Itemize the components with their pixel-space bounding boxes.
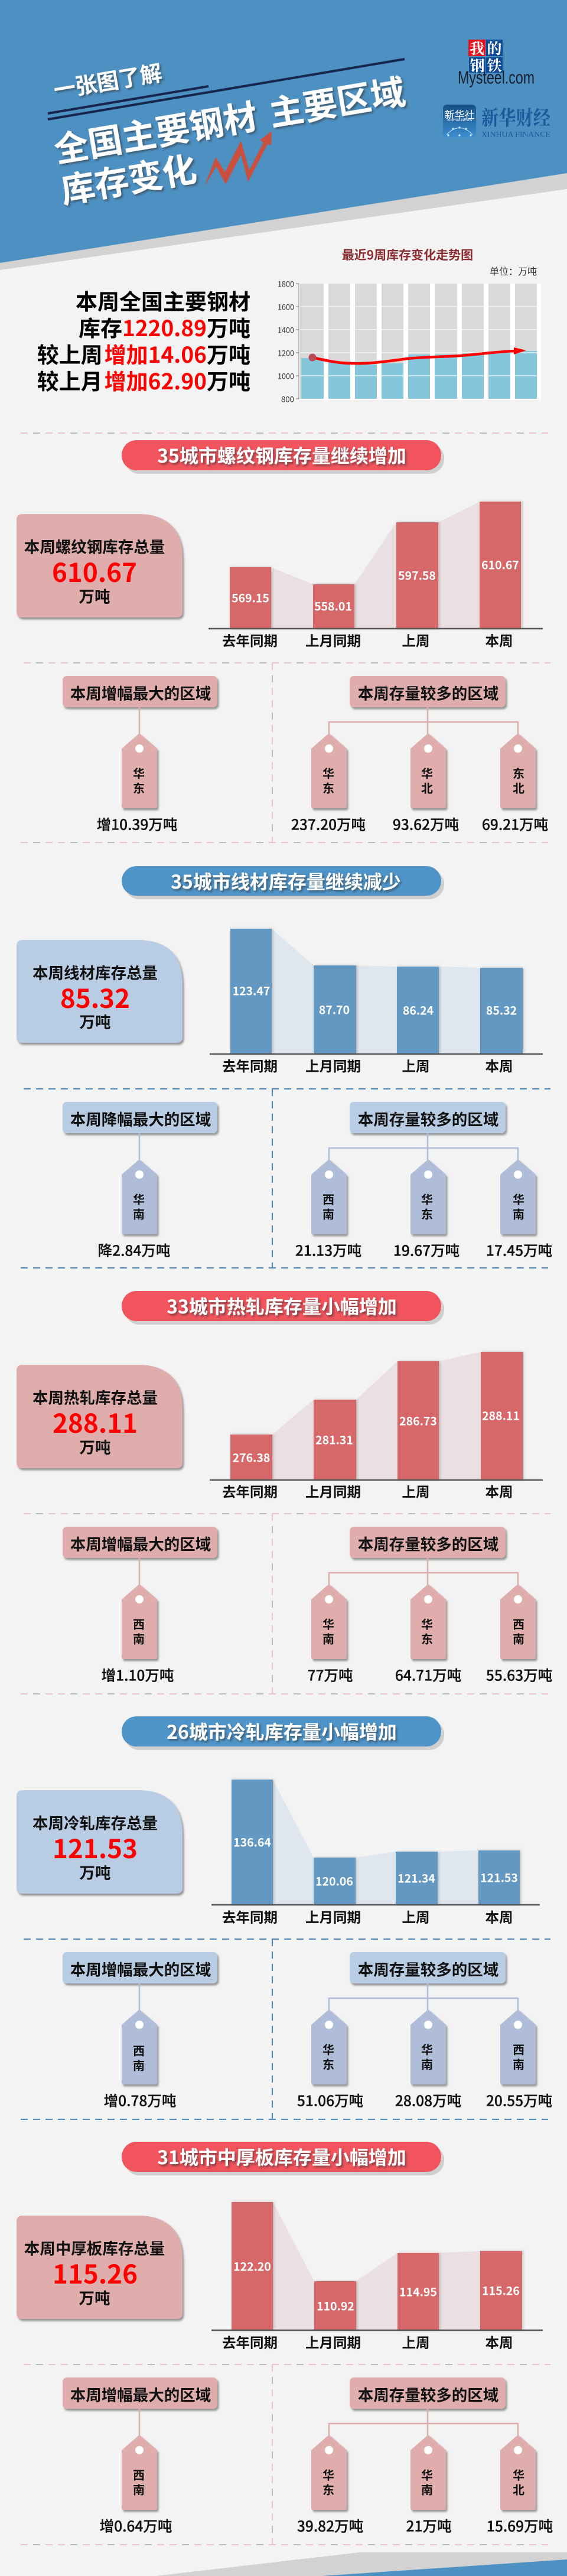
bar chart: 本周 xyxy=(485,1481,513,1501)
regions panel xyxy=(21,2364,553,2545)
logo: Mysteel: Mysteel.com xyxy=(458,67,535,87)
bar chart: 121.53 xyxy=(480,1868,518,1886)
right values xyxy=(297,2090,552,2110)
title line 1: 全国主要钢材 主要区域 xyxy=(50,64,408,173)
total stock box: 121.53 xyxy=(53,1828,138,1866)
total stock box: 万吨 xyxy=(79,1009,111,1033)
right values: 69.21万吨 xyxy=(482,814,548,834)
left value: 增0.78万吨 xyxy=(104,2090,176,2110)
bar chart xyxy=(210,1352,543,1501)
heading pill: 33城市热轧库存量小幅增加 xyxy=(167,1292,397,1319)
left label: largest increase xyxy=(63,1527,217,1558)
chart blue columns xyxy=(301,351,537,399)
tag: 华南: 南 xyxy=(513,1205,524,1222)
tag: 西南 xyxy=(122,2009,157,2084)
tag: 西南: 西 xyxy=(513,1615,524,1632)
right values xyxy=(297,2516,553,2536)
bar chart: 本周 xyxy=(485,630,513,650)
summary stats text: 本周全国主要钢材 xyxy=(76,284,250,316)
right connector xyxy=(329,707,518,734)
summary stats text xyxy=(37,284,250,396)
tag: 西南: 南 xyxy=(513,1629,524,1647)
right values: 39.82万吨 xyxy=(297,2516,363,2536)
chart gridlines xyxy=(299,307,541,376)
left label: largest increase xyxy=(63,2377,217,2409)
right values: 237.20万吨 xyxy=(291,814,366,834)
tag: 华北: 北 xyxy=(513,2480,524,2498)
right values: 64.71万吨 xyxy=(395,1665,461,1685)
tag: 西南: 西 xyxy=(513,2041,524,2057)
chart y labels: 1000 xyxy=(278,370,294,382)
tag: 华南 xyxy=(311,1584,347,1659)
tag: 西南: 西 xyxy=(133,2466,145,2483)
total stock box: 本周冷轧库存总量 xyxy=(32,1810,158,1834)
tag: 华南: 华 xyxy=(133,1190,145,1208)
tag: 华南: 南 xyxy=(421,2055,433,2073)
total stock box xyxy=(17,2216,183,2319)
tag: 华东: 华 xyxy=(421,1190,433,1208)
tag: 华东: 华 xyxy=(322,2041,334,2057)
tag: 华东 xyxy=(122,733,157,808)
chart unit: 单位：万吨 xyxy=(490,264,537,278)
total stock box: 万吨 xyxy=(79,1435,111,1458)
heading pill: 35城市线材库存量继续减少 xyxy=(171,867,401,895)
banner grey band xyxy=(0,0,567,270)
bar chart: 281.31 xyxy=(315,1431,353,1448)
total stock box: 本周螺纹钢库存总量 xyxy=(24,534,165,558)
bar chart: 558.01 xyxy=(314,597,352,614)
total stock box xyxy=(17,1365,183,1468)
right values xyxy=(295,1240,552,1261)
right values: 93.62万吨 xyxy=(393,814,459,834)
bar chart: 114.95 xyxy=(399,2283,437,2299)
summary stats text: 较上月增加62.90万吨 xyxy=(37,364,250,396)
tag: 华南 xyxy=(500,1159,536,1234)
chart y labels: 1400 xyxy=(278,324,294,336)
total stock box: 85.32 xyxy=(60,978,130,1016)
right values xyxy=(291,814,548,834)
right connector xyxy=(329,1558,518,1585)
bar chart: 597.58 xyxy=(398,566,436,584)
bar chart: 去年同期 xyxy=(222,1055,278,1075)
trend chart: last 9 weeks xyxy=(278,246,541,404)
left connector xyxy=(139,1558,140,1585)
bar chart: 136.64 xyxy=(233,1833,271,1850)
bar chart: 569.15 xyxy=(232,588,269,606)
bar chart: 本周 xyxy=(485,1906,513,1926)
tag: 华南: 华 xyxy=(421,2041,433,2057)
logo: Mysteel xyxy=(458,37,535,87)
left label: largest increase: 本周增幅最大的区域 xyxy=(70,2382,211,2406)
tag: 西南: 南 xyxy=(133,2056,145,2074)
tag: 西南 xyxy=(122,2435,157,2510)
bar chart: 110.92 xyxy=(317,2297,354,2314)
chart y labels xyxy=(278,278,294,404)
bar chart: 去年同期 xyxy=(222,2331,278,2351)
right label: highest stock xyxy=(350,1102,506,1133)
heading pill xyxy=(122,866,444,899)
right label: highest stock xyxy=(350,676,506,707)
bar chart: 121.34 xyxy=(397,1869,435,1886)
bar chart: 上月同期 xyxy=(305,1055,361,1075)
left value: 增0.64万吨 xyxy=(100,2516,172,2536)
bar chart: 上周 xyxy=(402,1055,430,1075)
bar chart: 286.73 xyxy=(399,1412,437,1429)
bar chart: 本周 xyxy=(485,1055,513,1075)
footer corner xyxy=(155,2552,567,2576)
tag: 华东 xyxy=(410,1584,446,1659)
chart plot white background xyxy=(299,284,541,400)
tag: 西南: 南 xyxy=(322,1205,334,1222)
section 1: rebar xyxy=(17,440,550,843)
tag: 华北: 华 xyxy=(421,765,433,781)
tag: 华东: 华 xyxy=(421,1615,433,1632)
logo: Xinhua news xyxy=(443,105,476,138)
divider above section 1 xyxy=(21,432,548,434)
icon: red zigzag arrow xyxy=(204,131,272,187)
tag: 华南: 华 xyxy=(421,2466,433,2483)
chart y labels: 1600 xyxy=(278,301,294,312)
bar chart: 上月同期 xyxy=(305,1906,361,1926)
left label: largest increase: 本周增幅最大的区域 xyxy=(70,681,211,704)
right label: highest stock: 本周存量较多的区域 xyxy=(358,1957,498,1980)
tag: 华北: 华 xyxy=(513,2466,524,2483)
tag: 西南 xyxy=(311,1159,347,1234)
regions panel xyxy=(21,1514,552,1694)
logo: Mysteel: 我 xyxy=(470,37,484,58)
logo: Mysteel: 的 xyxy=(487,37,502,58)
left value: 降2.84万吨 xyxy=(98,1240,170,1261)
tag: 华南: 南 xyxy=(421,2480,433,2498)
tag: 华东: 华 xyxy=(322,765,334,781)
logo: Xinhua news: 新华社 xyxy=(444,106,475,122)
total stock box: 610.67 xyxy=(52,552,137,590)
left connector xyxy=(139,2409,140,2436)
bar chart: 610.67 xyxy=(481,555,519,573)
tag: 西南: 南 xyxy=(133,2480,145,2498)
bar chart: 上月同期 xyxy=(305,630,361,650)
heading pill: 31城市中厚板库存量小幅增加 xyxy=(157,2143,406,2170)
chart y labels: 1200 xyxy=(278,347,294,358)
bar chart: 115.26 xyxy=(482,2282,520,2298)
left value: 增1.10万吨 xyxy=(102,1665,174,1685)
tag: 华北: 北 xyxy=(421,779,433,796)
total stock box: 万吨 xyxy=(79,2285,110,2309)
regions panel xyxy=(21,663,550,843)
tag: 华东: 东 xyxy=(322,2480,334,2498)
bar chart: 上月同期 xyxy=(305,1481,361,1501)
kicker: one chart explains: 一张图了解 xyxy=(51,55,164,105)
right values: 21万吨 xyxy=(406,2516,451,2536)
tag: 华东: 华 xyxy=(133,765,145,781)
right values: 19.67万吨 xyxy=(393,1240,460,1261)
chart grey columns xyxy=(300,284,537,399)
tag: 华南: 南 xyxy=(322,1629,334,1647)
bar chart: 本周 xyxy=(485,2331,513,2351)
tag: 西南: 西 xyxy=(133,2042,145,2058)
left label: largest increase xyxy=(63,1952,217,1983)
tag: 华东: 东 xyxy=(421,1205,433,1222)
right label: highest stock xyxy=(350,1952,506,1983)
tag: 华南: 南 xyxy=(133,1205,145,1222)
title rule lines xyxy=(48,59,405,119)
tag: 华南 xyxy=(410,2009,446,2084)
logo: Xinhua Finance: XINHUA FINANCE xyxy=(481,130,550,138)
title line 2: 库存变化 xyxy=(57,141,200,213)
bar chart: 86.24 xyxy=(403,1001,434,1019)
bar chart xyxy=(211,1780,540,1926)
total stock box: 万吨 xyxy=(79,1860,111,1884)
tag: 华东 xyxy=(311,733,347,808)
banner blue panel xyxy=(0,0,567,263)
total stock box: 本周线材库存总量 xyxy=(32,961,158,983)
total stock box: 本周中厚板库存总量 xyxy=(24,2236,165,2259)
bar chart: 上周 xyxy=(402,1481,430,1501)
section 2: wire rod xyxy=(17,866,552,1268)
bar chart: 去年同期 xyxy=(222,1906,278,1926)
left connector xyxy=(139,1983,140,2011)
right label: highest stock: 本周存量较多的区域 xyxy=(358,2382,498,2406)
logo: Xinhua Finance: 新华财经 xyxy=(481,102,551,131)
tag: 华东: 东 xyxy=(322,779,334,796)
tag: 西南: 南 xyxy=(513,2055,524,2073)
total stock box: 万吨 xyxy=(79,584,110,607)
chart title: 最近9周库存变化走势图 xyxy=(342,246,473,264)
right connector xyxy=(329,2409,518,2436)
tag: 华东: 华 xyxy=(322,2466,334,2483)
logo: Xinhua news: XINHUA NEWS xyxy=(447,119,472,122)
left label: largest increase: 本周增幅最大的区域 xyxy=(70,1531,211,1555)
total stock box: 本周热轧库存总量 xyxy=(32,1385,158,1409)
tag: 西南: 西 xyxy=(322,1190,334,1208)
right connector xyxy=(329,1983,518,2011)
right values: 15.69万吨 xyxy=(487,2516,553,2536)
right label: highest stock xyxy=(350,2377,506,2409)
chart y labels: 1800 xyxy=(278,278,294,290)
bar chart xyxy=(208,502,543,650)
section 4: cold rolled xyxy=(17,1716,552,2119)
section 5: medium plate xyxy=(17,2142,553,2545)
tag: 西南 xyxy=(122,1584,157,1659)
bar chart: 上月同期 xyxy=(305,2331,361,2351)
bar chart: 288.11 xyxy=(482,1406,520,1424)
tag: 华东 xyxy=(311,2009,347,2084)
chart y axis xyxy=(296,284,299,399)
heading pill xyxy=(122,2142,444,2175)
tag: 华东 xyxy=(410,1159,446,1234)
right values: 28.08万吨 xyxy=(395,2090,461,2110)
tag: 东北 xyxy=(500,733,536,808)
tag: 华北 xyxy=(500,2435,536,2510)
bar chart xyxy=(210,929,543,1075)
bar chart: 去年同期 xyxy=(222,630,278,650)
regions panel xyxy=(21,1939,552,2119)
bar chart xyxy=(211,2202,543,2351)
total stock box xyxy=(17,1790,183,1894)
left label: largest increase xyxy=(63,676,217,707)
right values: 20.55万吨 xyxy=(486,2090,552,2110)
tag: 西南 xyxy=(500,2009,536,2084)
header banner xyxy=(0,0,567,270)
tag: 西南: 西 xyxy=(133,1615,145,1632)
bar chart: 276.38 xyxy=(233,1449,270,1465)
left value: 增10.39万吨 xyxy=(97,814,177,834)
tag: 华东: 东 xyxy=(133,779,145,796)
right values: 77万吨 xyxy=(308,1665,353,1685)
total stock box xyxy=(17,940,183,1043)
tag: 东北: 东 xyxy=(513,765,524,781)
regions panel xyxy=(21,1089,552,1268)
right label: highest stock xyxy=(350,1527,506,1558)
heading pill xyxy=(122,1716,444,1750)
bar chart: 120.06 xyxy=(315,1872,353,1889)
heading pill xyxy=(122,440,444,474)
right label: highest stock: 本周存量较多的区域 xyxy=(358,1107,498,1130)
tag: 华南: 华 xyxy=(322,1615,334,1632)
bar chart: 85.32 xyxy=(486,1001,517,1019)
bar chart: 上周 xyxy=(402,1906,430,1926)
right label: highest stock: 本周存量较多的区域 xyxy=(358,681,498,704)
logo: Mysteel: 钢 xyxy=(470,54,485,76)
total stock box: 115.26 xyxy=(53,2253,138,2291)
tag: 华东: 东 xyxy=(322,2055,334,2073)
right values: 17.45万吨 xyxy=(486,1240,552,1261)
section 3: hot rolled xyxy=(17,1291,552,1694)
chart trend arrow xyxy=(308,347,526,363)
heading pill: 35城市螺纹钢库存量继续增加 xyxy=(157,441,406,469)
bar chart: 87.70 xyxy=(319,1001,350,1017)
bar chart: 上周 xyxy=(402,2331,430,2351)
left label: largest decrease xyxy=(63,1102,217,1133)
right values: 51.06万吨 xyxy=(297,2090,363,2110)
summary stats text: 库存1220.89万吨 xyxy=(79,311,250,343)
summary stats text: 较上周增加14.06万吨 xyxy=(37,337,250,369)
tag: 东北: 北 xyxy=(513,779,524,796)
right label: highest stock: 本周存量较多的区域 xyxy=(358,1531,498,1555)
right values: 55.63万吨 xyxy=(486,1665,552,1685)
total stock box xyxy=(17,514,183,617)
right values: 21.13万吨 xyxy=(295,1240,361,1261)
left connector xyxy=(139,707,140,734)
bar chart: 上周 xyxy=(402,630,430,650)
tag: 华南 xyxy=(410,2435,446,2510)
left connector xyxy=(139,1133,140,1160)
tag: 华东: 东 xyxy=(421,1629,433,1647)
tag: 西南 xyxy=(500,1584,536,1659)
right connector xyxy=(329,1133,518,1160)
tag: 华北 xyxy=(410,733,446,808)
right values xyxy=(308,1665,552,1685)
heading pill: 26城市冷轧库存量小幅增加 xyxy=(167,1718,397,1745)
logo: Mysteel: 铁 xyxy=(487,54,502,76)
heading pill xyxy=(122,1291,444,1325)
bar chart: 122.20 xyxy=(233,2257,271,2275)
left label: largest increase: 本周增幅最大的区域 xyxy=(70,1957,211,1980)
total stock box: 288.11 xyxy=(53,1403,138,1440)
tag: 西南: 南 xyxy=(133,1629,145,1647)
bar chart: 去年同期 xyxy=(222,1481,278,1501)
chart y labels: 800 xyxy=(281,393,294,404)
left label: largest decrease: 本周降幅最大的区域 xyxy=(70,1107,211,1130)
tag: 华东 xyxy=(311,2435,347,2510)
tag: 华南: 华 xyxy=(513,1190,524,1208)
bar chart: 123.47 xyxy=(233,982,270,998)
tag: 华南 xyxy=(122,1159,157,1234)
